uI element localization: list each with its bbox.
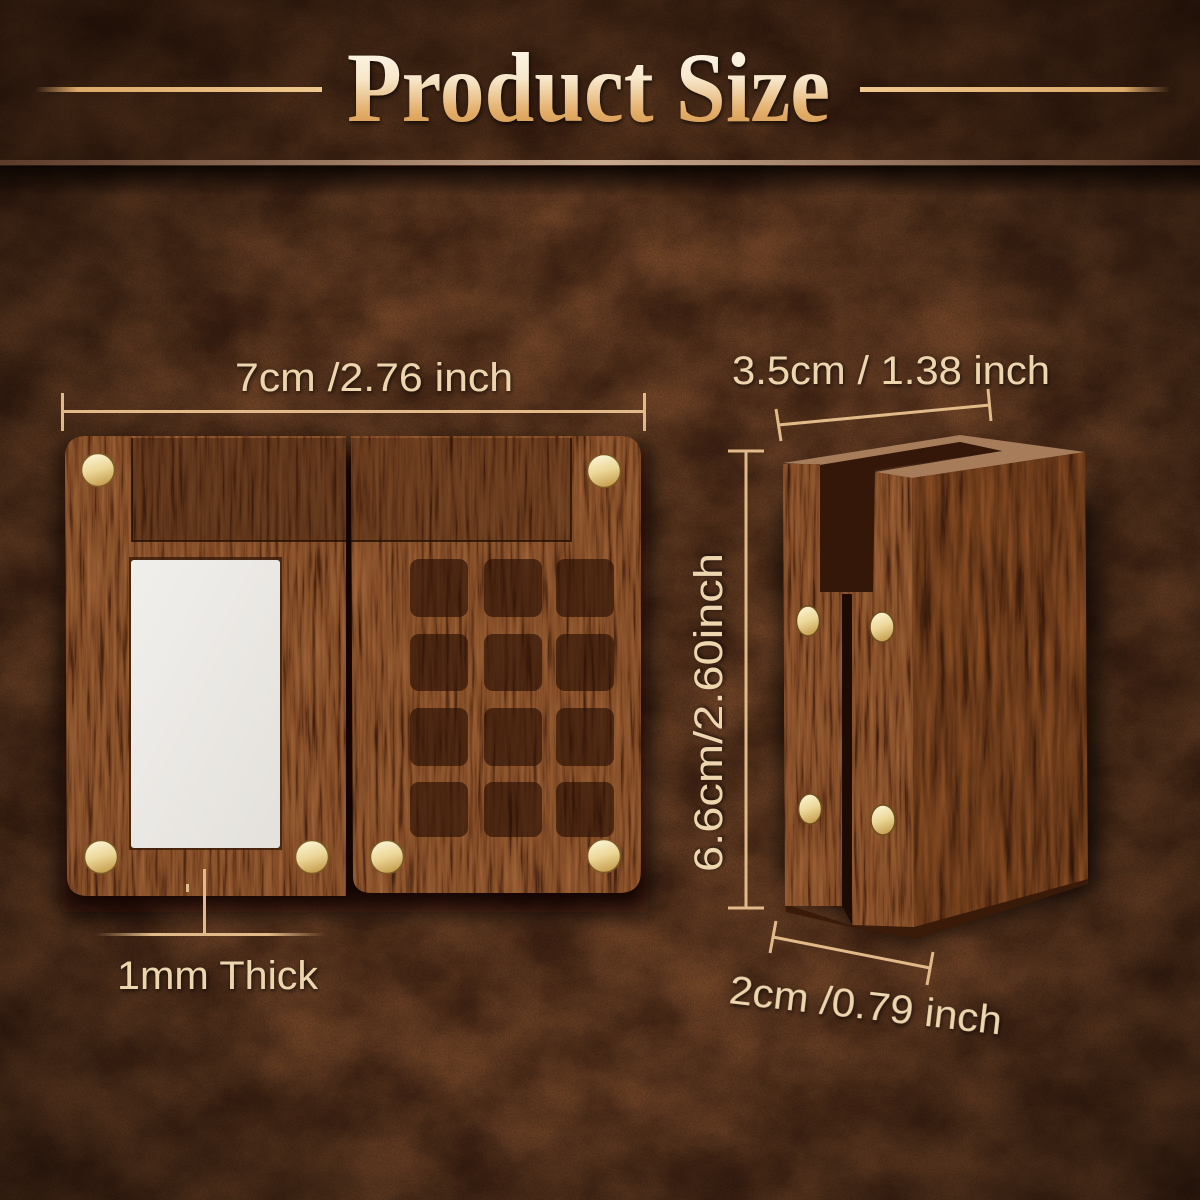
top rim	[783, 435, 1085, 478]
side face	[912, 452, 1088, 927]
recessed top strip	[351, 438, 571, 541]
width dimension: 7cm	[61, 356, 646, 431]
underside	[785, 877, 1088, 939]
closed wooden case	[778, 435, 1100, 945]
front slit	[842, 594, 852, 929]
height dimension: 6.6cm	[687, 451, 764, 908]
length dimension: 2cm	[727, 921, 1004, 1043]
title: Product Size	[347, 32, 830, 143]
opened case: two wooden plates	[60, 430, 648, 912]
white window	[129, 557, 282, 850]
header: title with gold rules	[35, 32, 1170, 143]
right title rule	[860, 87, 1170, 92]
length dimension: 2cm: 2cm /0.79 inch	[727, 968, 1004, 1043]
depth dimension: 3.5cm: 3.5cm / 1.38 inch	[732, 349, 1050, 393]
depth dimension: 3.5cm	[732, 349, 1050, 441]
left plate with white window	[60, 430, 350, 900]
right plate with compartments	[348, 430, 644, 898]
brass rivets on plates	[82, 454, 620, 874]
recessed top strip	[132, 438, 346, 541]
front face	[778, 458, 918, 933]
twelve compartments	[410, 559, 614, 837]
left title rule	[35, 87, 322, 92]
inner slot	[820, 442, 1002, 592]
height dimension: 6.6cm: 6.6cm/2.60inch	[687, 553, 731, 872]
width dimension: 7cm: 7cm /2.76 inch	[235, 356, 513, 400]
brass rivets on case	[796, 606, 895, 835]
thickness callout: 1mm: 1mm Thick	[117, 954, 319, 998]
thickness callout: 1mm	[95, 869, 325, 998]
